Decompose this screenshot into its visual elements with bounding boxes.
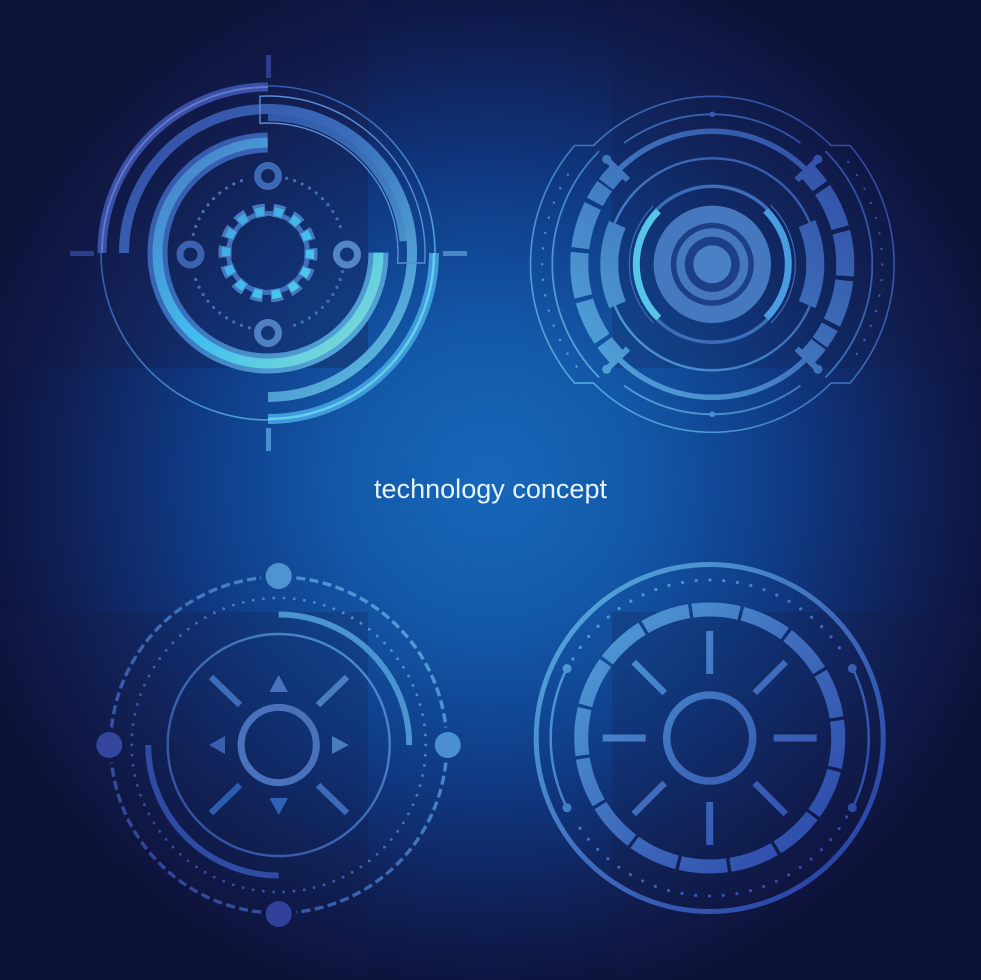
- four small ring nodes: [180, 166, 358, 344]
- dashed outer ring: [112, 578, 446, 912]
- bottom left arc: [148, 614, 409, 876]
- panel: concentric dial, top right: [530, 96, 894, 432]
- centre disc with rings: [654, 206, 771, 323]
- inner bright band arc: [158, 142, 378, 364]
- axis dots: [710, 112, 715, 417]
- centre ring: [667, 695, 753, 781]
- eight rays: [603, 631, 817, 845]
- segmented ring: [581, 610, 838, 866]
- corner handles: [602, 155, 822, 374]
- side dots: [542, 162, 882, 367]
- segmented band: [579, 131, 845, 397]
- connecting arcs: [579, 131, 845, 397]
- outer nodes: [96, 563, 461, 927]
- outer thick arcs: [102, 87, 434, 419]
- side arcs with end dots: [551, 579, 869, 897]
- thin arcs: [552, 104, 872, 424]
- central segmented ring: [225, 210, 311, 296]
- top right arc: [148, 614, 409, 876]
- thin ring: [168, 634, 390, 856]
- panel: target dial, top left: [70, 55, 467, 451]
- crosshair ticks: [70, 55, 467, 451]
- panel: segmented sun dial, bottom right: [536, 564, 883, 912]
- dotted ring: [132, 598, 426, 892]
- outlined sector: [260, 96, 425, 263]
- diagonal rays: [211, 677, 347, 813]
- title text: technology concept: [374, 474, 608, 504]
- outer bracket outline: [530, 96, 894, 432]
- outer thin ring arcs: [101, 86, 435, 420]
- arrow triangles: [209, 675, 349, 815]
- panel: sun dial with arrows, bottom left: [96, 563, 461, 927]
- ring with thick side blocks: [606, 158, 818, 370]
- middle band arc: [124, 109, 412, 397]
- centre ring: [241, 707, 316, 783]
- dotted ring: [193, 178, 343, 328]
- outer ring: [536, 564, 883, 912]
- inner thin arcs and bright side arcs: [629, 181, 795, 347]
- dot arcs: [573, 580, 846, 896]
